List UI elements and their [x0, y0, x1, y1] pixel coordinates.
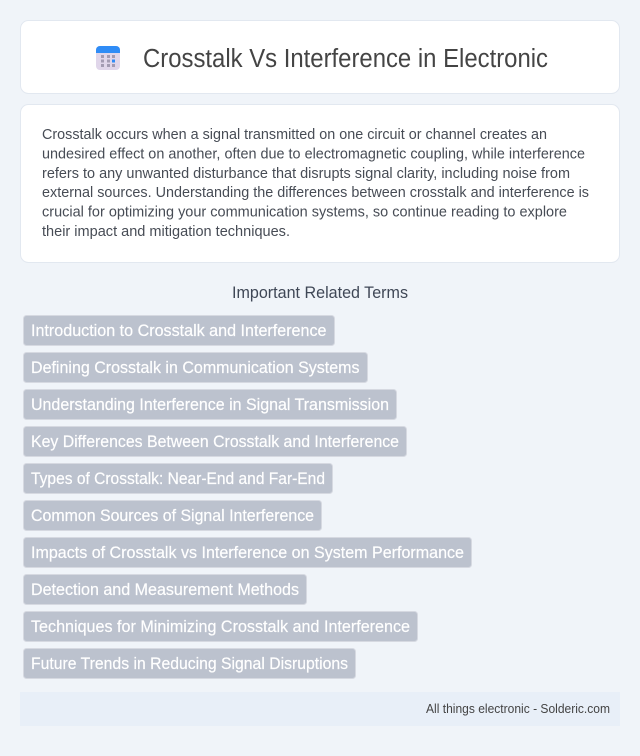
- panel: introduction: [20, 104, 620, 262]
- term 2: Defining Crosstalk in Communication Systems: [31, 359, 360, 377]
- footer: All things electronic - Solderic.com: [426, 702, 610, 716]
- term 9: [24, 612, 418, 642]
- term 7: Impacts of Crosstalk vs Interference on System Performance: [31, 544, 464, 562]
- term 6: Common Sources of Signal Interference: [31, 507, 314, 525]
- term 10: [24, 648, 356, 678]
- term 3: Understanding Interference in Signal Transmission: [31, 396, 389, 414]
- text block: introduction paragraph: their impact and mitigation techniques.: [42, 224, 290, 240]
- term 1: [24, 316, 334, 346]
- text block: introduction paragraph: refers to any unwanted disturbance that disrupts signal clarity, including noise from: [42, 166, 570, 182]
- term 9: Techniques for Minimizing Crosstalk and Interference: [31, 618, 410, 636]
- term 4: Key Differences Between Crosstalk and Interference: [31, 433, 399, 451]
- term 7: [24, 538, 472, 568]
- text block: introduction paragraph: external sources. Understanding the differences between crosstalk and interference is: [42, 185, 589, 201]
- term 5: Types of Crosstalk: Near-End and Far-End: [31, 470, 325, 488]
- term 1: Introduction to Crosstalk and Interference: [31, 322, 326, 340]
- term 3: [24, 390, 396, 420]
- text block: introduction paragraph: [42, 127, 589, 240]
- term list: [24, 316, 472, 678]
- term 5: [24, 464, 332, 494]
- heading: important related terms: Important Related Terms: [232, 284, 408, 302]
- icon: calendar: [96, 46, 120, 70]
- term 4: [24, 426, 406, 456]
- panel: header: [20, 20, 620, 94]
- text block: introduction paragraph: undesired effect on another, often due to electromagnetic coupling, while interference: [42, 146, 585, 162]
- term 8: Detection and Measurement Methods: [31, 581, 299, 599]
- footer: [20, 692, 620, 726]
- term 6: [24, 500, 322, 530]
- text block: introduction paragraph: Crosstalk occurs when a signal transmitted on one circuit or channel creates an: [42, 127, 547, 143]
- term 2: [24, 352, 368, 382]
- term 8: [24, 574, 306, 604]
- title: Crosstalk Vs Interference in Electronic: [143, 45, 548, 73]
- term 10: Future Trends in Reducing Signal Disruptions: [31, 655, 348, 673]
- text block: introduction paragraph: crucial for optimizing your communication systems, so continue reading to explore: [42, 205, 567, 221]
